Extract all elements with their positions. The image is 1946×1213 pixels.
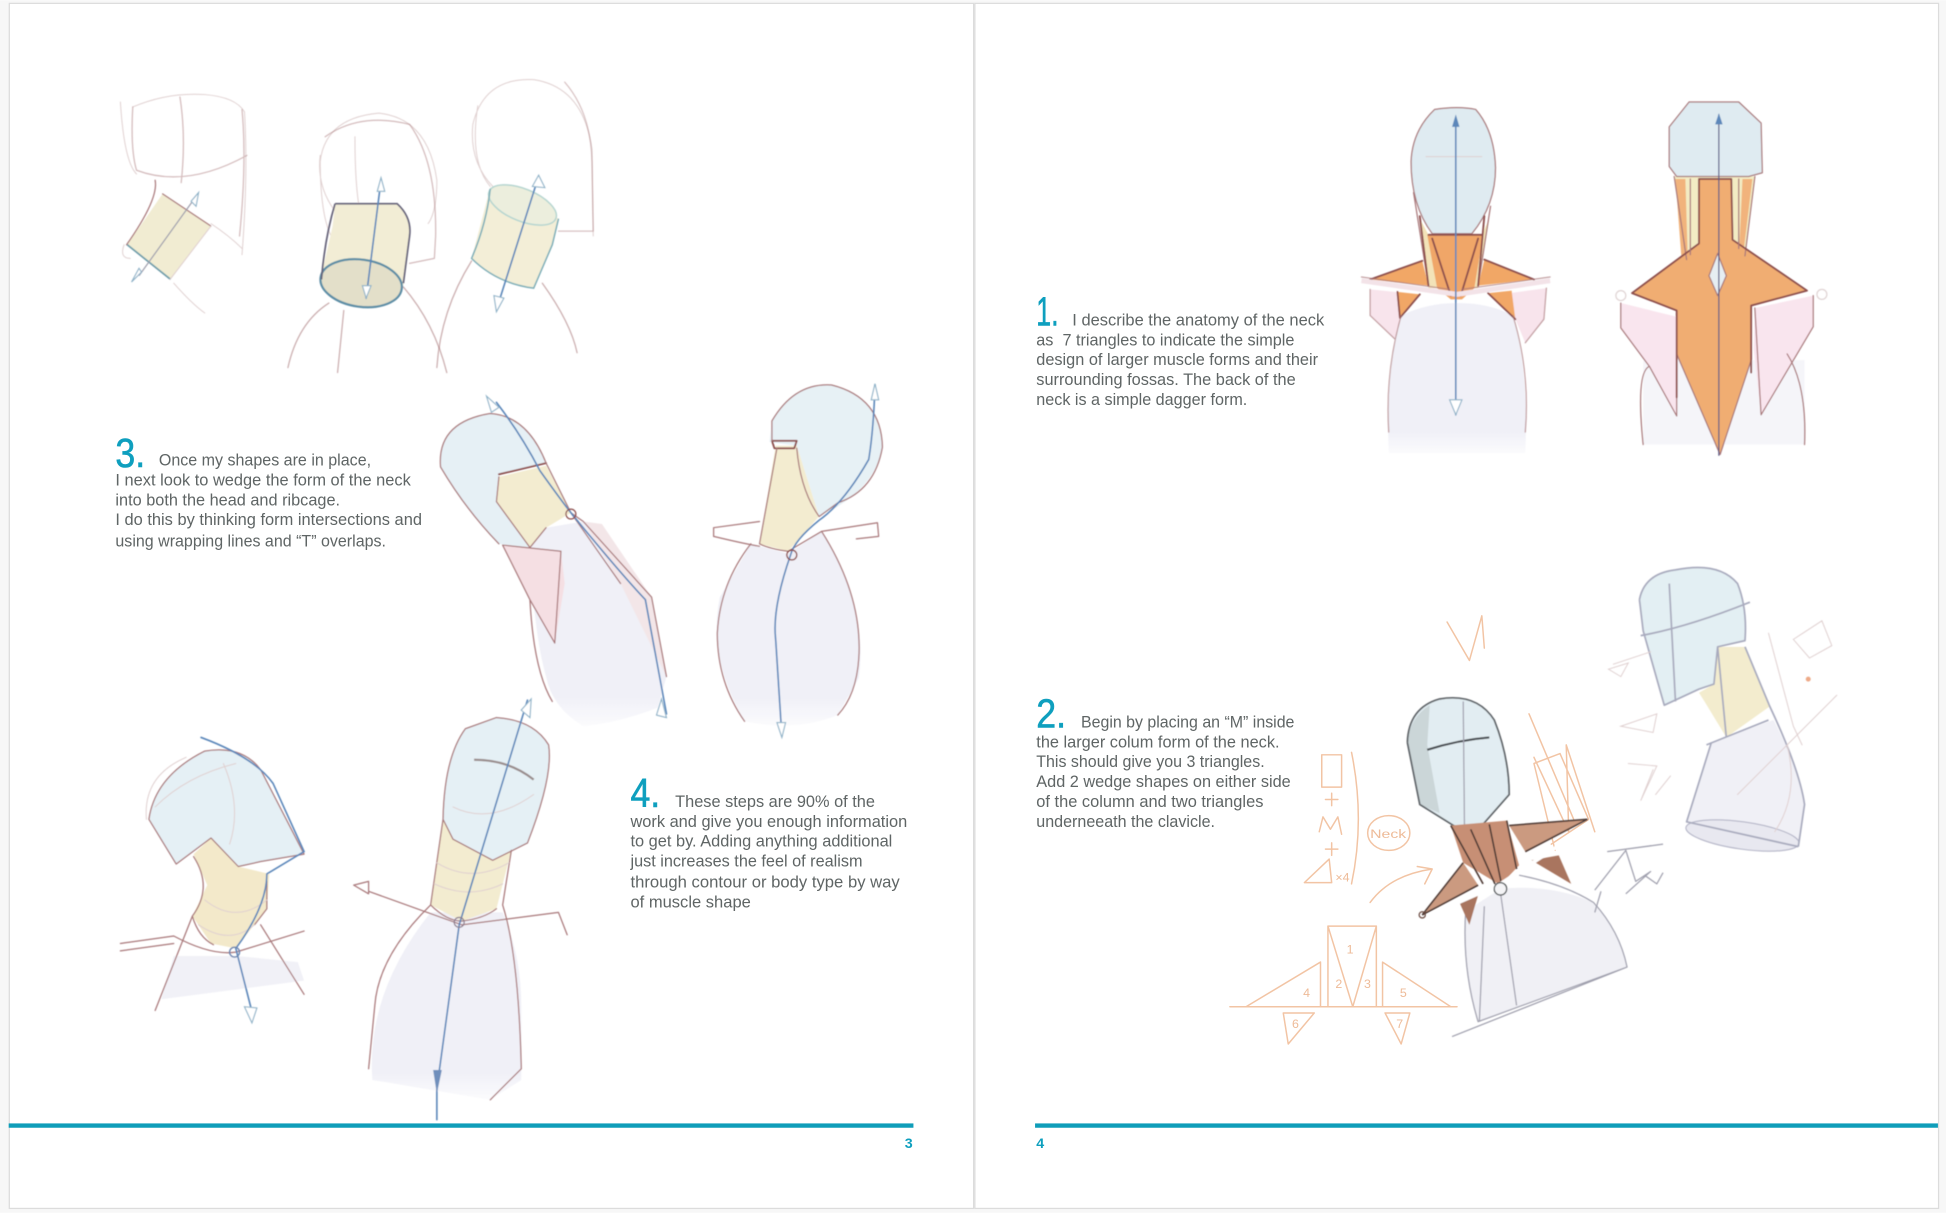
sketch: rotated bust with M neck <box>1407 698 1627 1037</box>
step 3 text: into both the head and ribcage. <box>115 491 340 509</box>
step 3 text: I next look to wedge the form of the neck <box>115 471 412 489</box>
step 1 text <box>1036 288 1325 409</box>
step 1 text: I describe the anatomy of the neck <box>1072 311 1325 329</box>
step 3 text: 3. <box>115 430 145 476</box>
step 4 text: These steps are 90% of the <box>675 793 875 811</box>
footer rule left <box>9 1123 913 1128</box>
sketch: neck cylinder with wrapped top <box>437 80 593 368</box>
sketch: neck cylinder side view <box>120 94 247 313</box>
step 4 text <box>629 770 907 911</box>
step 1 text: design of larger muscle forms and their <box>1036 351 1319 369</box>
step 2 text: the larger colum form of the neck. <box>1036 733 1280 751</box>
sketch: three-quarter bust top right <box>1595 567 1837 912</box>
step 2 text: of the column and two triangles <box>1036 793 1263 811</box>
step 2 text: 2. <box>1036 691 1066 737</box>
orange notes and seven triangle diagram: 5 <box>1400 986 1407 1000</box>
step 4 text: just increases the feel of realism <box>629 853 863 871</box>
orange notes and seven triangle diagram: 2 <box>1335 977 1342 991</box>
orange notes and seven triangle diagram <box>1230 616 1595 1044</box>
sketch: frontal bust with long blue axis <box>354 699 567 1120</box>
footer rule right <box>1035 1123 1938 1128</box>
step 3 text: I do this by thinking form intersections and <box>115 511 422 529</box>
sketch: bust turned, bottom left <box>120 737 304 1023</box>
orange notes and seven triangle diagram: 6 <box>1292 1017 1299 1031</box>
sketch: head from behind with blue spine <box>714 384 882 737</box>
step 2 text: This should give you 3 triangles. <box>1036 753 1265 771</box>
step 4 text: to get by. Adding anything additional <box>630 833 892 851</box>
step 1 text: 1. <box>1036 288 1059 334</box>
orange notes and seven triangle diagram: Neck <box>1370 827 1407 841</box>
step 1 text: neck is a simple dagger form. <box>1036 391 1247 409</box>
sketch: back of neck dagger form <box>1616 102 1827 456</box>
orange notes and seven triangle diagram: 1 <box>1347 942 1354 956</box>
step 4 text: work and give you enough information <box>629 813 907 831</box>
orange notes and seven triangle diagram: ×4 <box>1335 870 1350 884</box>
orange notes and seven triangle diagram: 3 <box>1364 977 1371 991</box>
step 4 text: 4. <box>630 770 660 816</box>
step 1 text: surrounding fossas. The back of the <box>1036 371 1296 389</box>
sketch: tilted figure with pink wedge <box>440 396 666 726</box>
step 3 text: Once my shapes are in place, <box>159 452 371 470</box>
step 2 text: Add 2 wedge shapes on either side <box>1036 773 1291 791</box>
page number 4: 4 <box>1036 1136 1044 1152</box>
step 3 text <box>115 430 422 550</box>
step 3 text: using wrapping lines and “T” overlaps. <box>115 532 386 550</box>
step 4 text: through contour or body type by way <box>630 874 901 892</box>
page number 3: 3 <box>905 1136 913 1152</box>
sketch: neck cylinder with end ellipse <box>288 113 447 373</box>
orange notes and seven triangle diagram: 7 <box>1396 1017 1403 1031</box>
right page <box>975 3 1939 1208</box>
step 1 text: as 7 triangles to indicate the simple <box>1036 331 1294 349</box>
step 4 text: of muscle shape <box>630 893 751 911</box>
left page <box>9 3 974 1208</box>
step 2 text: underneeath the clavicle. <box>1036 813 1215 831</box>
step 2 text: Begin by placing an “M” inside <box>1081 714 1294 732</box>
orange notes and seven triangle diagram: 4 <box>1303 986 1310 1000</box>
sketch: front neck triangles <box>1361 108 1550 453</box>
step 2 text <box>1036 691 1294 831</box>
